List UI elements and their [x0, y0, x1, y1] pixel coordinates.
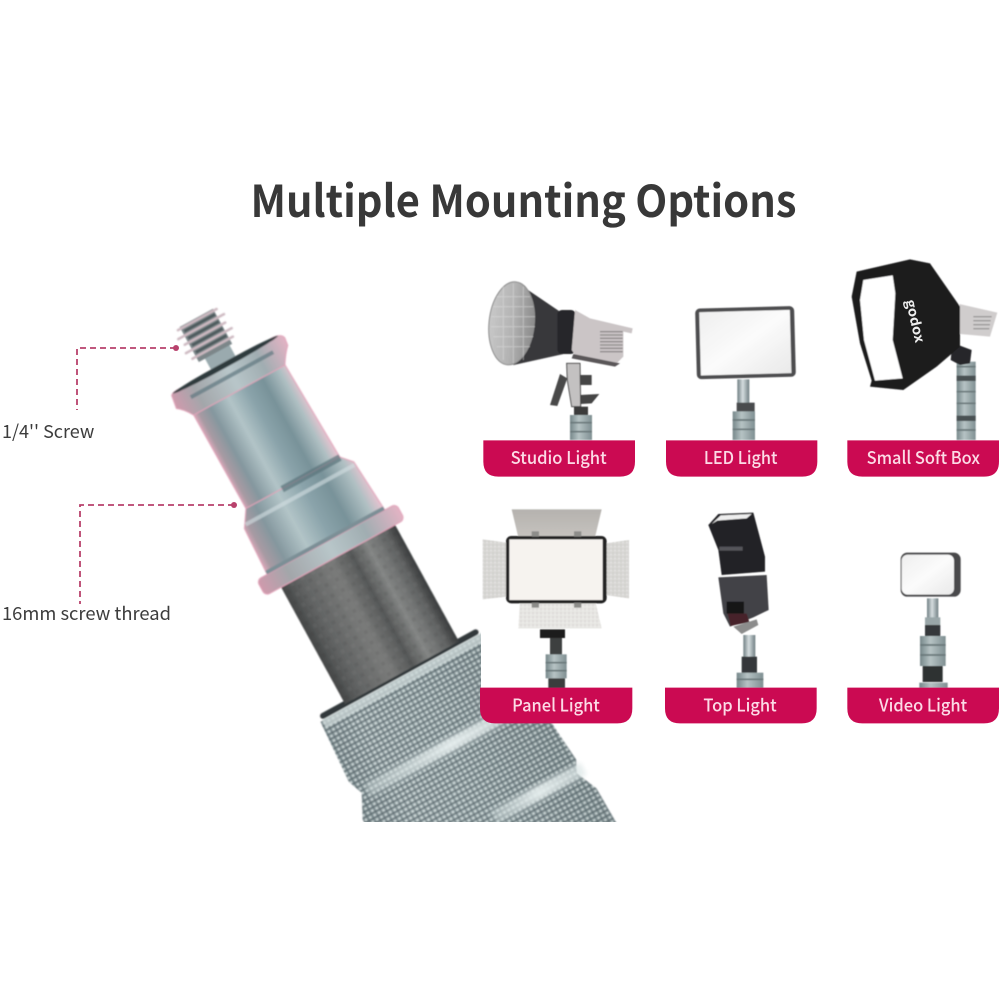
label: video light: [847, 688, 999, 723]
callout: 16mm screw thread: 16mm screw thread: [2, 600, 171, 626]
1/4 inch screw thread: [176, 307, 236, 370]
label: video light: Video Light: [878, 692, 967, 717]
bottom flange: [255, 500, 405, 596]
tile: studio light: [483, 280, 635, 477]
top flange: [170, 334, 289, 416]
icon: studio light: [485, 280, 633, 440]
icon: soft box: [852, 259, 997, 440]
label: top light: [665, 688, 817, 723]
label: panel light: [480, 688, 632, 723]
upper barrel: [191, 358, 340, 509]
title: Multiple Mounting Options: [250, 166, 796, 230]
label: LED light: [666, 440, 817, 477]
tile: LED light: [666, 306, 817, 477]
callout: 1/4 inch screw: 1/4'' Screw: [2, 418, 94, 444]
label: small soft box: Small Soft Box: [867, 445, 980, 470]
tile: top light: [665, 513, 817, 723]
icon: speedlight flash: [708, 513, 769, 688]
tile: video light: [847, 553, 999, 723]
knurled grip: [319, 628, 617, 822]
text: godox logo: godox: [902, 297, 930, 345]
main product: mounting spigot: [170, 307, 617, 822]
icon: video light: [901, 553, 961, 688]
callout: 1/4 inch screw: [2, 345, 179, 444]
label: top light: Top Light: [703, 692, 777, 717]
label: LED light: LED Light: [704, 445, 777, 470]
tile: small soft box: [847, 259, 999, 477]
label: studio light: Studio Light: [511, 445, 607, 470]
carbon tube: [280, 522, 459, 704]
icon: panel light with barn doors: [483, 509, 629, 688]
panel: white tile backdrop: [481, 490, 1000, 712]
lower collar: [233, 448, 384, 573]
tile: panel light: [480, 509, 632, 723]
label: small soft box: [847, 440, 999, 477]
label: panel light: Panel Light: [512, 692, 600, 717]
callout: 16mm screw thread: [2, 502, 237, 626]
icon: LED panel: [695, 306, 796, 440]
label: studio light: [483, 440, 635, 477]
